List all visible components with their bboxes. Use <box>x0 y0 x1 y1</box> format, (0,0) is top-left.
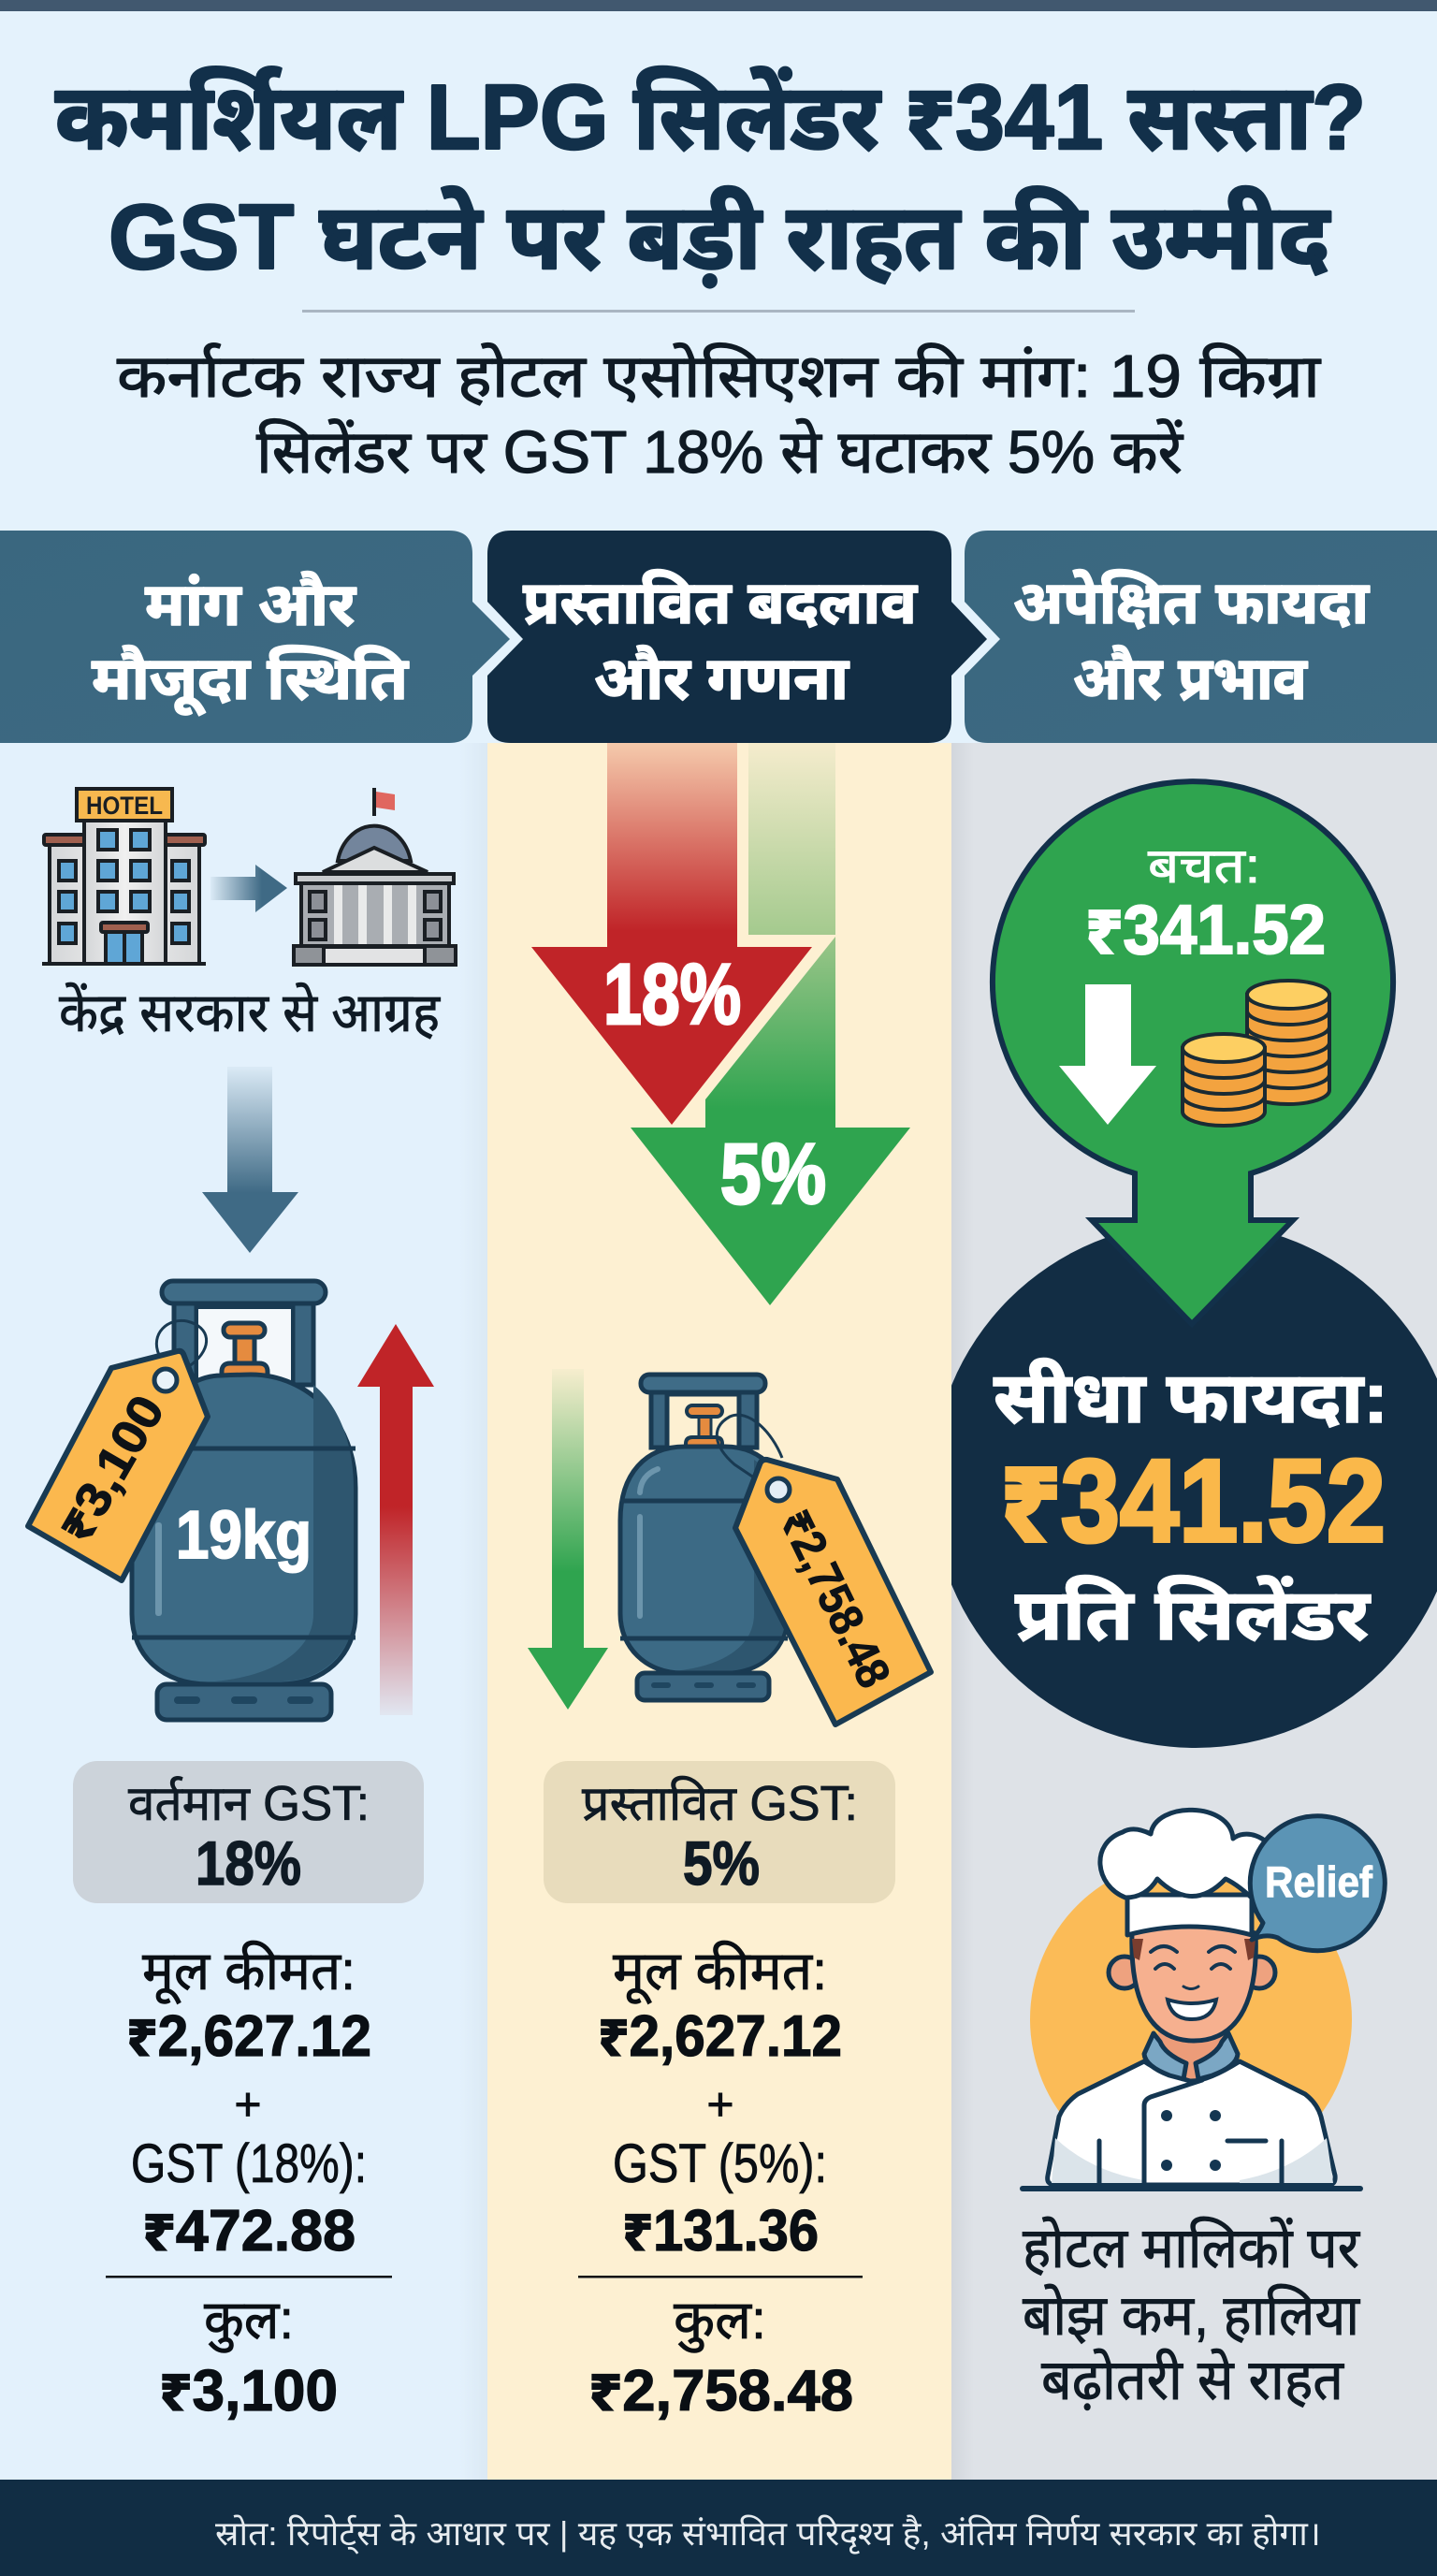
text: column 1 calculation: कुल: <box>204 2290 294 2353</box>
text: column 2 calculation: ₹2,758.48 <box>588 2359 853 2423</box>
panel: column 2 background <box>487 743 951 2480</box>
icon: government building <box>294 788 456 965</box>
text: column 1 calculation: मूल कीमत: <box>142 1941 356 2005</box>
panel: column 1 background <box>0 743 487 2480</box>
text: hotel owners relief: बोझ कम, हालिया <box>1023 2284 1360 2347</box>
chef jacket <box>1048 2033 1335 2185</box>
text: hotel owners relief <box>1023 2217 1360 2411</box>
arrow: blue down <box>202 1067 298 1253</box>
text: column 1 calculation <box>106 1941 392 2423</box>
subtitle: सिलेंडर पर GST 18% से घटाकर 5% करें <box>256 418 1184 486</box>
header: column 2: प्रस्तावित बदलाव <box>523 569 918 636</box>
text: hotel owners relief: बढ़ोतरी से राहत <box>1041 2349 1345 2411</box>
header: column 1: मौजूदा स्थिति <box>92 645 409 717</box>
text: column 2 calculation: GST (5%): <box>613 2133 827 2194</box>
box: current GST <box>73 1761 424 1903</box>
header: column 3 <box>965 531 1437 743</box>
chef hat <box>1100 1810 1277 1935</box>
panel: column 3 background <box>951 743 1437 2480</box>
callout: direct benefit: सीधा फायदा: <box>994 1359 1388 1438</box>
icon: chef with relief bubble <box>1020 1810 1385 2191</box>
subtitle <box>117 342 1322 486</box>
text: column 1 calculation: ₹472.88 <box>142 2199 356 2263</box>
icon: cylinder 19kg: 19kg <box>176 1498 312 1573</box>
header: column 3: अपेक्षित फायदा <box>1013 569 1370 636</box>
arrow: green 5% down <box>631 743 910 1305</box>
arrow: red 18% down <box>531 743 812 1125</box>
title divider <box>302 310 1135 313</box>
box: proposed GST <box>544 1761 895 1903</box>
text: column 1 calculation: + <box>234 2078 262 2131</box>
text: hotel owners relief: होटल मालिकों पर <box>1023 2217 1360 2279</box>
arrow: green down <box>528 1369 608 1710</box>
icon: hotel: HOTEL <box>86 792 163 820</box>
icon: white down arrow <box>1059 984 1156 1125</box>
footer <box>0 2480 1437 2576</box>
callout: savings circle and arrow <box>993 781 1393 1324</box>
header: column 2: और गणना <box>594 645 849 712</box>
header: column 1: मांग और <box>145 571 357 638</box>
header: column 1 <box>0 531 510 743</box>
footer: स्रोत: रिपोर्ट्स के आधार पर | यह एक संभावित परिदृश्य है, अंतिम निर्णय सरकार का होगा। <box>215 2514 1321 2554</box>
text: column 2 calculation: कुल: <box>674 2290 766 2353</box>
text: column 2 calculation: मूल कीमत: <box>613 1941 827 2005</box>
icon: cylinder proposed <box>620 1375 788 1700</box>
arrow: hotel to government <box>210 865 287 912</box>
callout: savings circle and arrow: ₹341.52 <box>1085 891 1326 968</box>
text: column 2 calculation: ₹2,627.12 <box>598 2004 842 2069</box>
chef ears <box>1109 1957 1275 1988</box>
chef face <box>1132 1925 1256 2041</box>
arrow: red up <box>357 1324 434 1715</box>
title: GST घटने पर बड़ी राहत की उम्मीद <box>109 185 1331 288</box>
callout: savings circle and arrow: बचत: <box>1148 839 1260 894</box>
text: column 2 calculation: + <box>706 2078 734 2131</box>
title <box>55 65 1366 288</box>
speech bubble: relief <box>1250 1816 1385 1951</box>
chef neck and collar <box>1158 2030 1229 2081</box>
title: कमर्शियल LPG सिलेंडर ₹341 सस्ता? <box>55 65 1366 168</box>
header: column 2 <box>487 531 987 743</box>
icon: price tag 2758.48 <box>717 1415 931 1725</box>
text: column 2 calculation <box>578 1941 863 2423</box>
callout: direct benefit: ₹341.52 <box>1000 1436 1386 1566</box>
box: proposed GST: प्रस्तावित GST: <box>582 1777 858 1831</box>
speech bubble: relief: Relief <box>1265 1857 1373 1906</box>
label: request to central government: केंद्र सरकार से आग्रह <box>59 982 441 1043</box>
text: column 2 calculation: ₹131.36 <box>622 2199 819 2263</box>
icon: price tag 3100 <box>28 1320 208 1580</box>
icon: price tag 3100: ₹3,100 <box>49 1387 175 1551</box>
header: column 3: और प्रभाव <box>1073 645 1308 712</box>
chef counter line <box>1020 2186 1363 2191</box>
arrow: green 5% down: 5% <box>720 1127 826 1222</box>
top bar <box>0 0 1437 11</box>
arrow: red 18% down: 18% <box>603 947 741 1042</box>
callout: direct benefit: प्रति सिलेंडर <box>1015 1575 1372 1655</box>
icon: cylinder 19kg <box>132 1281 356 1720</box>
icon: coin stacks <box>1183 981 1329 1126</box>
subtitle: कर्नाटक राज्य होटल एसोसिएशन की मांग: 19 किग्रा <box>117 342 1322 410</box>
box: proposed GST: 5% <box>683 1828 760 1898</box>
icon: price tag 2758.48: ₹2,758.48 <box>770 1501 901 1696</box>
box: current GST: 18% <box>196 1828 301 1898</box>
box: current GST: वर्तमान GST: <box>128 1776 370 1831</box>
icon: hotel <box>42 789 206 964</box>
callout: direct benefit <box>932 1222 1437 1748</box>
text: column 1 calculation: ₹3,100 <box>159 2359 338 2423</box>
text: column 1 calculation: GST (18%): <box>131 2133 367 2194</box>
text: column 1 calculation: ₹2,627.12 <box>126 2004 371 2069</box>
